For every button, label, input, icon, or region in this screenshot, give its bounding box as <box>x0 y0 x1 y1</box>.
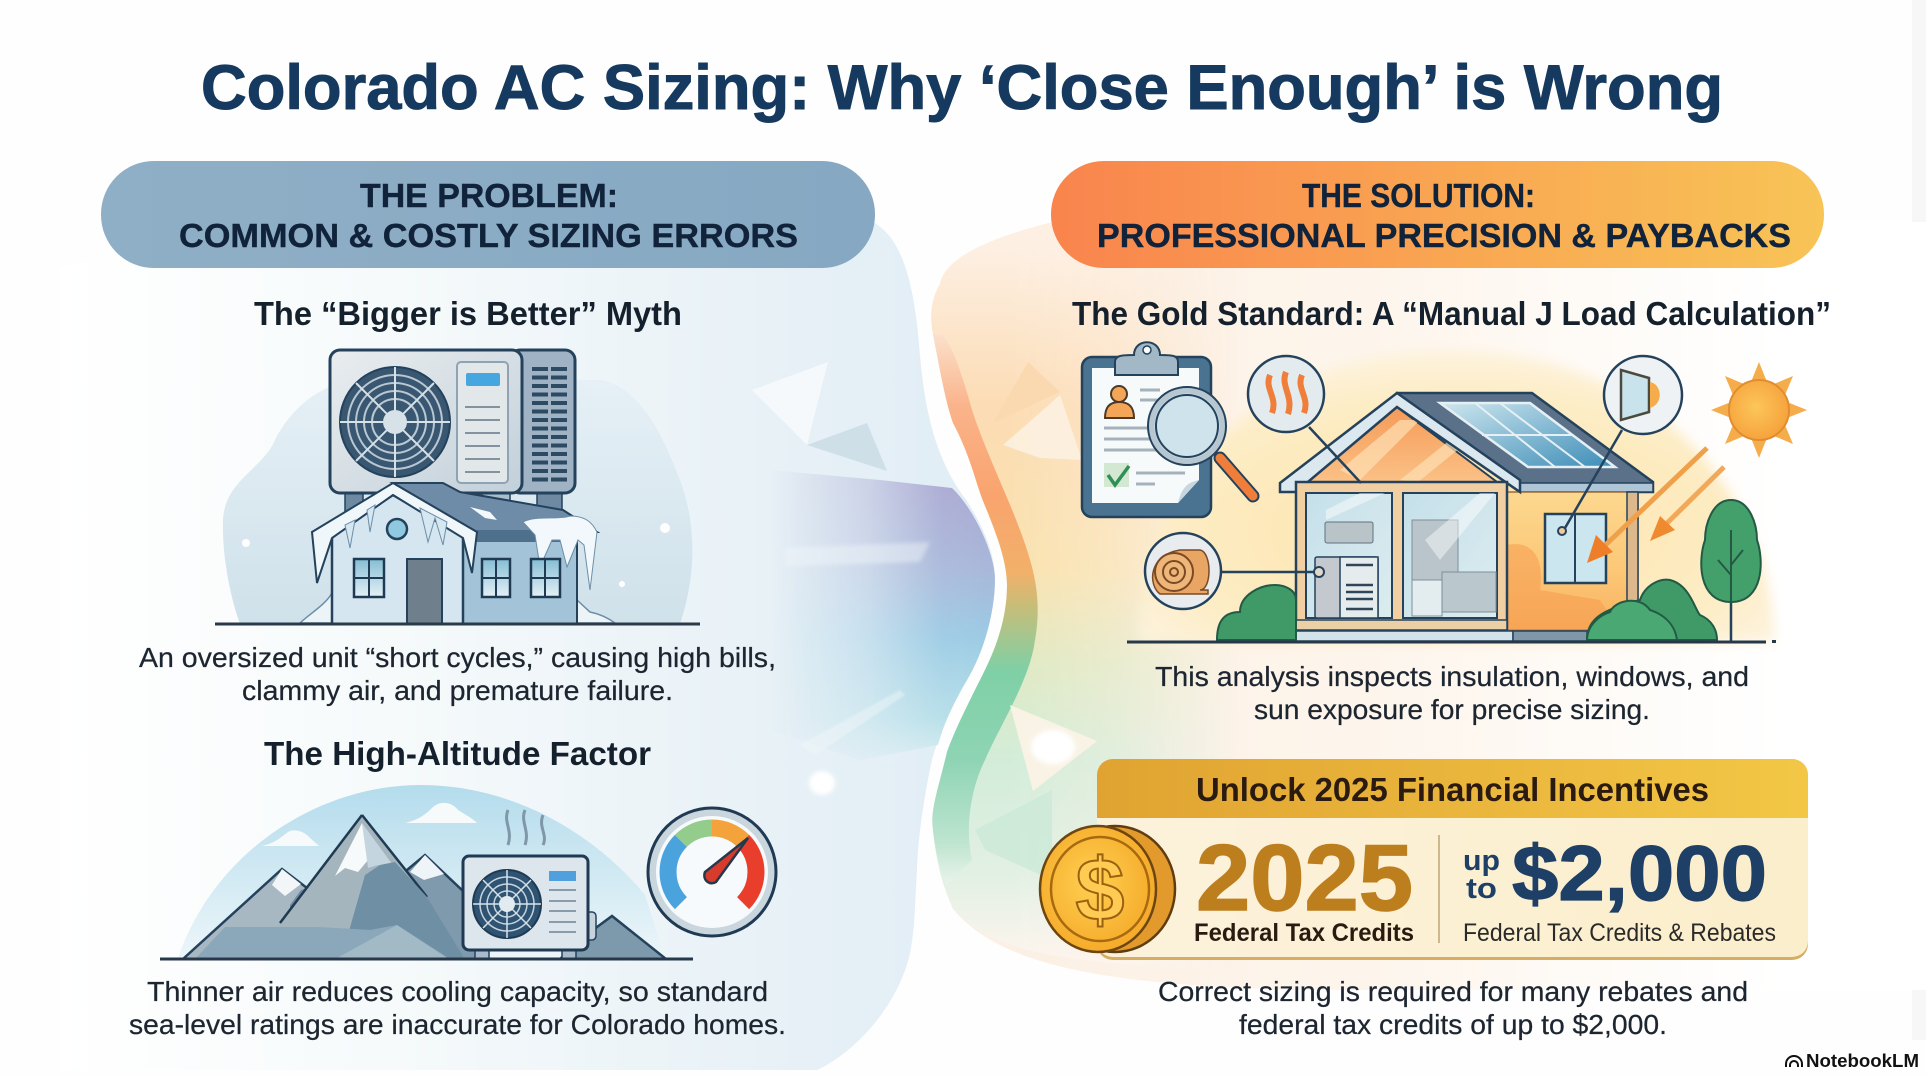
text block: oversized unit <box>139 642 776 706</box>
icon: pressure gauge <box>648 808 776 936</box>
icon: sunlight arrows <box>1587 448 1724 563</box>
icon: clipboard and magnifier <box>1082 342 1253 517</box>
text block: rebates: federal tax credits of up to $2,000. <box>1239 1009 1667 1040</box>
illustration: mountains, AC unit and gauge <box>160 785 776 959</box>
icon: heat callout <box>1248 356 1361 483</box>
text block: rebates: Correct sizing is required for many rebates and <box>1158 976 1748 1007</box>
text block: rebates <box>1158 976 1748 1040</box>
text block: analysis <box>1155 661 1749 725</box>
icon: tree and bushes <box>1217 500 1761 642</box>
stat: up to $2,000: to <box>1466 873 1497 905</box>
background: solution side wave <box>931 222 1582 990</box>
heading: gold standard: The Gold Standard: A “Manual J Load Calculation” <box>1072 295 1831 332</box>
icon: gold dollar coin: $ <box>1076 840 1124 939</box>
illustration: Manual J load calculation house <box>1082 342 1807 643</box>
panel header: the solution <box>1051 161 1824 268</box>
heading: bigger is better myth: The “Bigger is Better” Myth <box>254 295 682 332</box>
stat: up to $2,000: $2,000 <box>1512 829 1767 917</box>
icon: heat waves <box>507 810 544 845</box>
panel header: the solution: THE SOLUTION: <box>1302 177 1535 214</box>
title: Colorado AC Sizing: Why ‘Close Enough’ is Wrong <box>201 53 1723 123</box>
stat: 2025 federal tax credits: 2025 <box>1196 825 1413 930</box>
text block: thinner air: sea-level ratings are inaccurate for Colorado homes. <box>129 1009 786 1040</box>
text block: thinner air: Thinner air reduces cooling capacity, so standard <box>147 976 768 1007</box>
stat: 2025 federal tax credits: Federal Tax Credits <box>1194 919 1414 947</box>
NotebookLM badge: NotebookLM <box>1806 1051 1919 1071</box>
icon: small AC unit <box>463 856 596 959</box>
heading: high-altitude factor: The High-Altitude Factor <box>264 735 651 772</box>
icon: oversized outdoor AC unit <box>330 350 575 512</box>
panel: 2025 financial incentives <box>1040 759 1808 960</box>
heading: unlock incentives: Unlock 2025 Financial Incentives <box>1196 771 1709 808</box>
stat: up to $2,000 <box>1463 829 1776 947</box>
text block: analysis: sun exposure for precise sizing. <box>1254 694 1650 725</box>
illustration: oversized AC on frozen house <box>215 350 700 624</box>
icon: frozen house with icicles <box>300 483 615 624</box>
panel header: the problem: THE PROBLEM: <box>360 177 618 214</box>
text block: analysis: This analysis inspects insulation, windows, and <box>1155 661 1749 692</box>
stat: up to $2,000: Federal Tax Credits & Rebates <box>1463 919 1776 947</box>
icon: solar-loaded house <box>1280 393 1653 641</box>
icon: window sun callout <box>1558 356 1682 535</box>
stat: up to $2,000: up <box>1463 845 1500 877</box>
text block: thinner air <box>129 976 786 1040</box>
panel header: the solution: PROFESSIONAL PRECISION & PAYBACKS <box>1097 217 1791 254</box>
text block: oversized unit: An oversized unit “short cycles,” causing high bills, <box>139 642 776 673</box>
icon: gold dollar coin <box>1040 826 1175 952</box>
icon: sun <box>1711 362 1807 458</box>
background: problem side wave <box>389 223 995 1070</box>
panel header: the problem <box>101 161 875 268</box>
icon: mountains <box>183 815 666 959</box>
icon: insulation callout <box>1145 533 1324 609</box>
panel header: the problem: COMMON & COSTLY SIZING ERRORS <box>179 217 798 254</box>
text block: oversized unit: clammy air, and premature failure. <box>242 675 673 706</box>
